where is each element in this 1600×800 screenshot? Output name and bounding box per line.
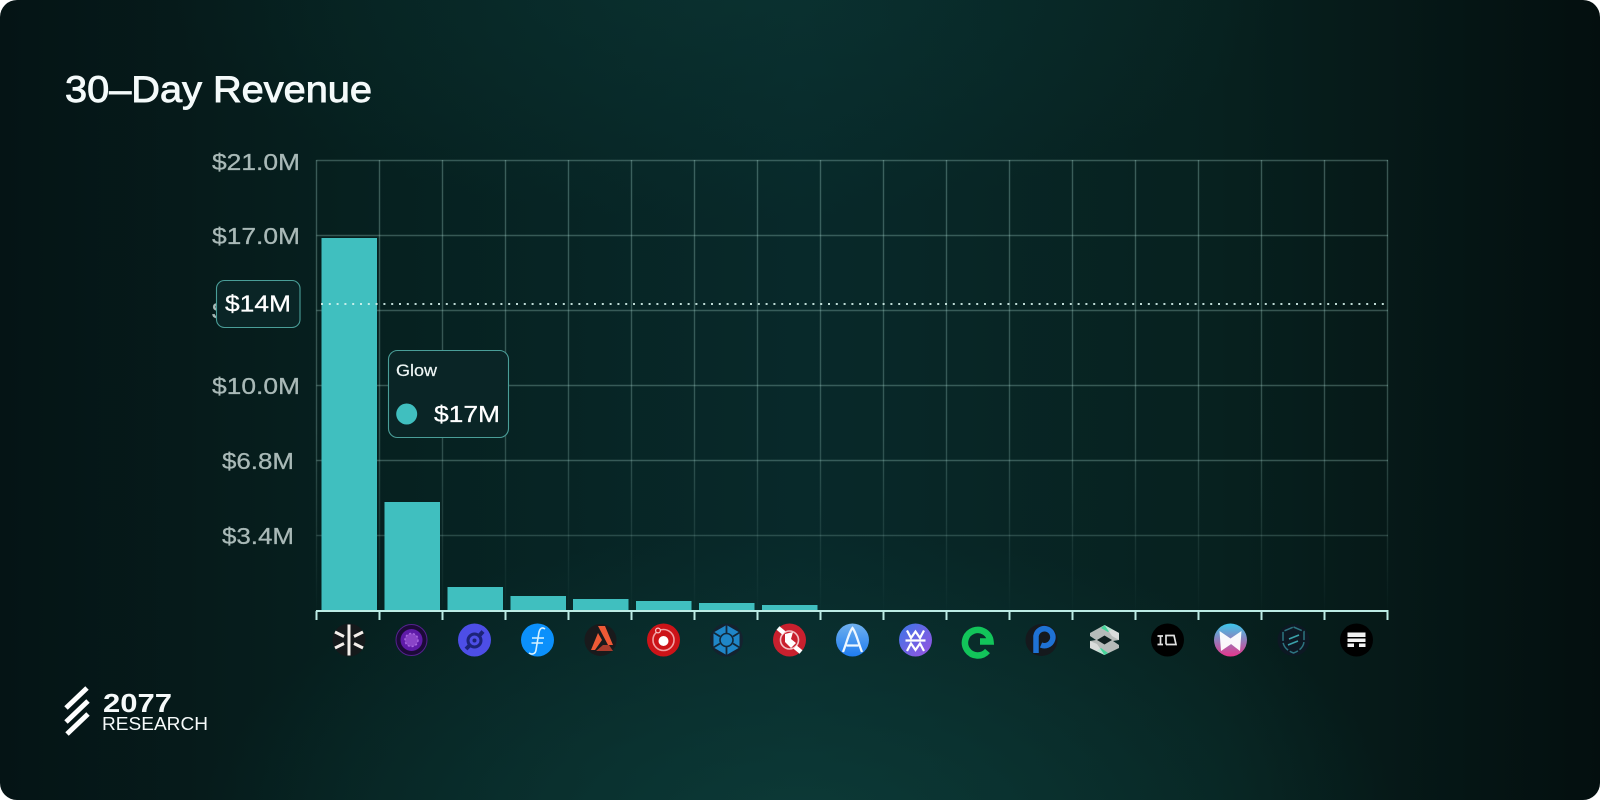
logo: 2077 Research bbox=[66, 688, 208, 734]
icon: purple W M bbox=[899, 624, 932, 656]
icon: blue A bbox=[836, 624, 869, 656]
icon: gradient M bbox=[1214, 624, 1247, 656]
icon: dark shield bbox=[1278, 624, 1310, 656]
x-axis with ticks bbox=[316, 611, 1388, 620]
bars bbox=[322, 238, 818, 610]
logo wordmark bbox=[102, 688, 208, 734]
icon: Glow bbox=[332, 624, 366, 656]
y-axis labels: $3.4M bbox=[222, 523, 294, 549]
tooltip: Glow $17M: Glow bbox=[396, 362, 437, 380]
protocol icon row bbox=[332, 624, 1373, 656]
bar chart: 30-day revenue by protocol bbox=[212, 149, 1388, 620]
dotted reference line at $14M bbox=[321, 303, 1388, 305]
icon: blue P bbox=[1026, 624, 1058, 656]
y-axis labels: $17.0M bbox=[212, 223, 300, 249]
reference value label: $14M bbox=[225, 290, 291, 316]
icon: red ring bbox=[647, 624, 680, 656]
logo wordmark: RESEARCH bbox=[102, 714, 208, 734]
y-axis labels: $6.8M bbox=[222, 448, 294, 474]
icon: black IO mark bbox=[1151, 624, 1184, 656]
icon: blue hexagon bbox=[710, 624, 743, 656]
y-axis labels: $21.0M bbox=[212, 149, 300, 175]
tooltip: Glow $17M bbox=[388, 350, 508, 438]
logo stripes bbox=[66, 688, 88, 734]
icon: Filecoin bbox=[521, 624, 554, 656]
logo wordmark: 2077 bbox=[103, 688, 172, 718]
reference value label bbox=[216, 280, 300, 328]
tooltip: Glow $17M: $17M bbox=[434, 401, 500, 427]
y-axis labels bbox=[212, 149, 300, 549]
icon: Akash bbox=[584, 624, 616, 656]
title: 30–Day Revenue bbox=[65, 68, 372, 110]
icon: black table mark bbox=[1340, 624, 1373, 656]
icon: grey stacked shape bbox=[1090, 625, 1119, 655]
icon: helium-style blue bbox=[458, 624, 491, 656]
icon: green e bbox=[965, 630, 990, 655]
y-axis labels: $10.0M bbox=[212, 373, 300, 399]
chart grid bbox=[316, 160, 1388, 610]
y-axis labels: $13.6M bbox=[212, 298, 300, 324]
icon: red globe bbox=[773, 624, 806, 656]
icon: purple orb bbox=[396, 624, 427, 656]
